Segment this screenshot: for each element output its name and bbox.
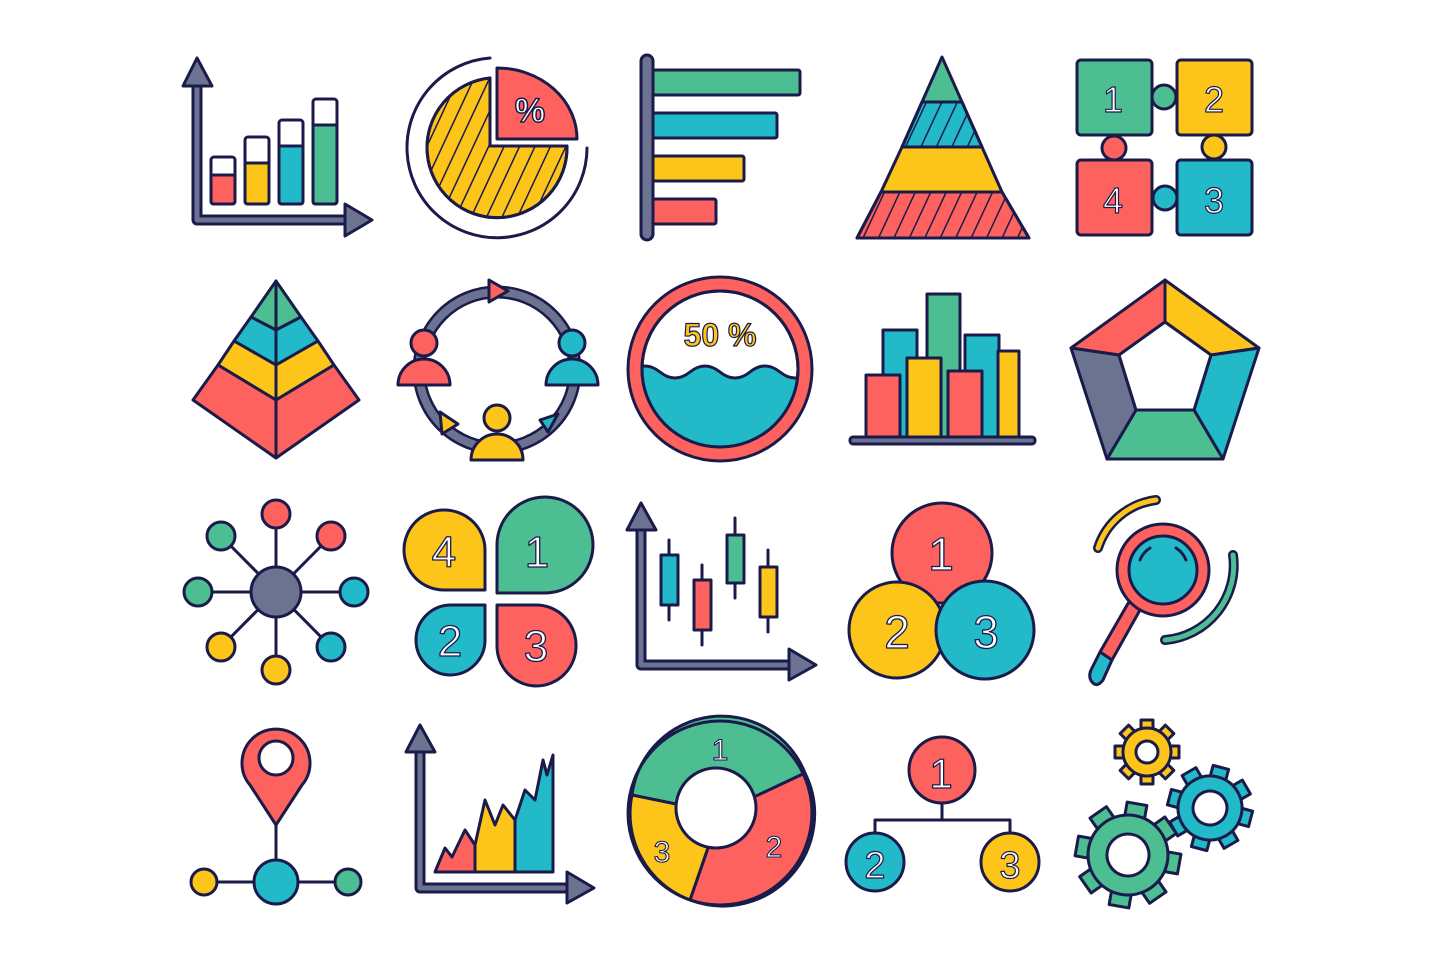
icon: puzzle pieces: 1 <box>1103 79 1123 120</box>
icon: bar chart with axes <box>183 58 372 236</box>
icon: gears <box>1068 720 1261 915</box>
icon: four petals numbered <box>404 497 593 686</box>
icon: 50 percent gauge <box>628 277 812 461</box>
icon: layered triangle <box>857 57 1029 238</box>
icon: donut chart: 1 <box>712 734 728 767</box>
icon: magnifier <box>1090 500 1234 685</box>
icon: 3D pyramid <box>193 281 359 458</box>
icon: venn circles <box>849 503 1034 679</box>
icon: hierarchy tree: 3 <box>999 845 1021 887</box>
icon: pie chart percent: % <box>515 92 545 130</box>
icon: hierarchy tree <box>846 737 1039 891</box>
icon: venn circles: 1 <box>928 528 954 580</box>
icon: four petals numbered: 2 <box>438 617 462 666</box>
icon: donut chart <box>628 716 815 906</box>
icon: column chart <box>850 294 1035 444</box>
icon: network hub <box>184 500 368 684</box>
icon: puzzle pieces: 4 <box>1103 180 1123 221</box>
icon: hierarchy tree: 1 <box>929 750 953 797</box>
icon: area chart <box>406 725 594 903</box>
icon: puzzle pieces: 2 <box>1204 79 1224 120</box>
icon: team cycle <box>398 280 598 460</box>
icon: horizontal bar chart <box>641 55 800 240</box>
icon: four petals numbered: 4 <box>432 528 456 577</box>
icon: 50 percent gauge: 50 % <box>684 317 756 353</box>
icon: location pin network <box>191 729 361 904</box>
icon: hierarchy tree: 2 <box>864 845 886 887</box>
icon: pentagon <box>1071 280 1259 459</box>
icon: puzzle pieces <box>1077 60 1252 235</box>
icon: donut chart: 2 <box>766 831 782 864</box>
icon: four petals numbered: 1 <box>525 528 549 577</box>
icon: venn circles: 2 <box>884 606 910 658</box>
icon: puzzle pieces: 3 <box>1204 180 1224 221</box>
icon: candlestick chart <box>627 503 816 680</box>
icon: venn circles: 3 <box>973 606 999 658</box>
icon: donut chart: 3 <box>654 836 670 869</box>
icon: pie chart percent <box>407 58 587 238</box>
icon: four petals numbered: 3 <box>524 622 548 671</box>
